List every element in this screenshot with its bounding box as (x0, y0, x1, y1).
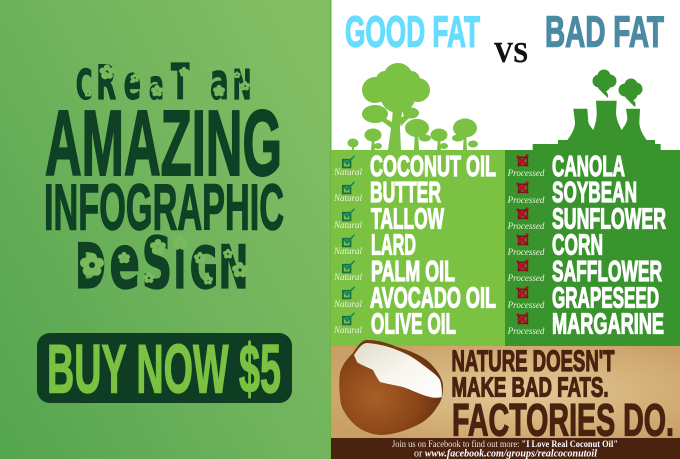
row: sunflower: Processed (507, 221, 545, 231)
row: butter: BUTTER (370, 177, 441, 209)
heading: design: I (173, 236, 186, 303)
row: safflower: Processed (507, 273, 545, 283)
row: palm oil (333, 256, 455, 288)
row: safflower (507, 256, 662, 288)
heading: design: S (142, 223, 172, 305)
heading: design: e (109, 218, 140, 306)
row: coconut oil: Natural (333, 167, 362, 177)
row: soybean (507, 177, 637, 209)
heading: create an: C (76, 61, 92, 109)
panel: tan banner (331, 340, 680, 446)
panel: bad fat list (505, 150, 680, 346)
row: sunflower (507, 204, 666, 236)
row: lard (333, 230, 416, 262)
row: olive oil: OLIVE OIL (371, 308, 456, 340)
heading: design: N (218, 232, 249, 303)
heading: create an: a (210, 53, 229, 111)
row: tallow (333, 204, 444, 236)
row: canola: CANOLA (552, 151, 625, 183)
row: tallow: TALLOW (371, 204, 444, 236)
left green promo panel (0, 0, 331, 459)
row: olive oil (333, 308, 456, 340)
row: butter (333, 177, 441, 209)
row: coconut oil: COCONUT OIL (370, 151, 496, 183)
heading: good fat: GOOD FAT (345, 8, 480, 56)
row: olive oil: Natural (333, 325, 362, 335)
panel: good fat list (331, 150, 505, 346)
heading: amazing: AMAZING (45, 91, 282, 195)
row: palm oil: PALM OIL (371, 256, 455, 288)
heading: create an: e (124, 57, 141, 110)
icon: factory (533, 70, 661, 150)
row: soybean: Processed (507, 195, 545, 205)
row: canola (507, 151, 625, 183)
heading: infographic: INFOGRAPHIC (44, 170, 284, 244)
heading: design (75, 218, 249, 306)
row: grapeseed: Processed (507, 300, 545, 310)
heading: create an: a (149, 62, 164, 109)
row: corn (507, 230, 603, 262)
row: tallow: Natural (333, 220, 362, 230)
buy now button (37, 330, 292, 408)
heading: create an (76, 53, 252, 111)
buy now button: BUY NOW $5 (47, 330, 281, 408)
heading: design: D (75, 232, 106, 304)
footer bar (331, 438, 680, 459)
row: coconut oil (333, 151, 496, 183)
icon: coconut (339, 340, 443, 435)
row: butter: Natural (333, 193, 362, 203)
row: lard: LARD (371, 230, 416, 262)
heading: create an: N (233, 61, 252, 109)
row: avocado oil: Natural (333, 299, 362, 309)
row: palm oil: Natural (333, 272, 362, 282)
heading: create an: T (171, 54, 189, 111)
row: avocado oil: AVOCADO OIL (370, 282, 496, 314)
vs label: VS (494, 38, 528, 69)
icon: trees (348, 63, 478, 150)
row: margarine: Processed (507, 326, 545, 336)
row: corn: Processed (507, 247, 545, 257)
heading: create an: R (96, 56, 116, 110)
row: avocado oil (333, 282, 496, 314)
row: corn: CORN (552, 230, 603, 262)
heading: design: G (190, 236, 218, 303)
row: grapeseed (507, 282, 659, 314)
row: canola: Processed (507, 168, 545, 178)
right infographic panel (330, 0, 680, 459)
row: lard: Natural (333, 246, 362, 256)
row: margarine (507, 308, 664, 340)
footer text line 1: Join us on Facebook to find out more: "I Love Real Coconut Oil" (392, 439, 618, 449)
